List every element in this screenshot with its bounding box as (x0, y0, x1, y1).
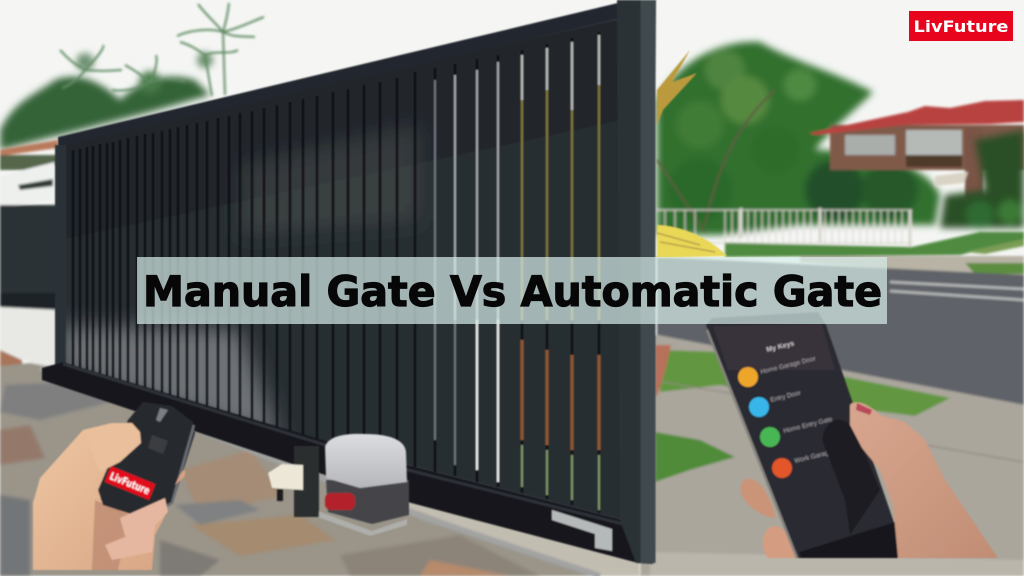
remote top button (156, 408, 168, 422)
post highlight (640, 0, 656, 563)
phone status bar area (713, 324, 835, 370)
left fingertip upper (741, 478, 776, 518)
key item: entry door (749, 389, 802, 417)
palm frond yellow (657, 50, 727, 258)
mounting post (294, 446, 319, 517)
left fingertip lower (763, 526, 797, 558)
phone home bar (799, 522, 900, 558)
key item: entry door: Entry Door (770, 389, 802, 404)
side wall base (0, 307, 60, 372)
sliding gate (42, 0, 656, 564)
sidewalk (640, 335, 1024, 576)
lower reflection on slats (62, 325, 280, 440)
brand logo (909, 11, 1013, 41)
garden shrubs (940, 130, 1024, 229)
title: Manual Gate Vs Automatic Gate (143, 267, 882, 316)
fence lower rail (0, 293, 60, 308)
phone body (706, 312, 900, 558)
terracotta pot (655, 345, 671, 396)
key item: home garage door: Home Garage Door (760, 355, 817, 376)
screen heading: My Keys (766, 340, 795, 354)
side fence (0, 205, 60, 310)
thumb shadow on screen (822, 420, 880, 535)
remote logo badge: LivFuture (108, 470, 151, 497)
key item: work garage: Work Garage (794, 449, 833, 465)
remote side highlight (147, 425, 194, 517)
remote middle button (148, 435, 168, 454)
road markings (890, 282, 1024, 300)
white bracket (268, 464, 303, 490)
brand logo: LivFuture (914, 17, 1009, 36)
light through gaps: white lower (477, 320, 498, 482)
motor cover (325, 434, 407, 488)
wall dark ledge (18, 179, 53, 190)
light through gaps: dim (435, 80, 455, 465)
mounting plate (315, 510, 407, 536)
hand (33, 423, 167, 570)
slat gaps left (73, 32, 599, 513)
stone patches (0, 382, 540, 576)
rail bracket (552, 510, 612, 551)
key item: home entry gate: Home Entry Gate (783, 416, 834, 435)
smartphone in hand (706, 312, 998, 558)
side wall top (0, 162, 55, 207)
tree mass (0, 52, 213, 150)
lower fingers (105, 498, 168, 560)
kerb line (657, 381, 1024, 462)
fence (657, 208, 912, 248)
top rail (58, 0, 640, 147)
neighbouring roof (0, 140, 58, 156)
motor base (326, 480, 409, 524)
key item: home garage door (738, 355, 817, 387)
upper dark shading (60, 18, 623, 240)
track rail (40, 368, 600, 576)
light through gaps: yellow (522, 85, 599, 320)
thumb (83, 423, 141, 472)
title band (137, 257, 887, 324)
tree trunks (657, 90, 775, 232)
cable plug (277, 489, 283, 501)
upper grass patch (660, 350, 950, 416)
light through gaps: top white (522, 35, 599, 110)
road (657, 257, 1024, 405)
bottom rail (42, 362, 638, 563)
grass verge and driveway (725, 232, 1024, 275)
right side finger tip (175, 470, 185, 485)
tree foliage (657, 42, 940, 235)
palm fronds (60, 3, 264, 96)
remote control (98, 402, 195, 518)
light through gaps: gray upper (455, 62, 498, 320)
neighbouring house wall (0, 155, 58, 170)
left post (55, 145, 66, 365)
slat shading (60, 18, 623, 440)
hand shadow between fingers (92, 500, 130, 570)
terracotta ledge (0, 350, 22, 368)
phone bezel highlight (707, 330, 797, 558)
rail top edge highlight (63, 364, 623, 524)
light through gaps: brown (522, 340, 599, 450)
red release handle (325, 493, 355, 510)
fingernail (856, 403, 872, 415)
light through gaps: green (522, 445, 599, 510)
remote logo badge (105, 466, 155, 500)
gate body (60, 18, 623, 520)
bottom pavement band (650, 552, 1024, 576)
stone paving (0, 363, 640, 576)
scene: right side street and house (640, 42, 1024, 576)
lower grass patch (655, 432, 735, 482)
left hand holding remote (33, 402, 195, 570)
scene: left palms (0, 3, 640, 576)
right post (617, 0, 656, 564)
gate motor (268, 434, 409, 536)
house (809, 100, 1024, 198)
right hand (850, 402, 998, 558)
key item: work garage (772, 449, 833, 478)
light paving under gate (395, 490, 640, 576)
key item: home entry gate (760, 416, 834, 447)
mid reflection band (240, 125, 420, 235)
